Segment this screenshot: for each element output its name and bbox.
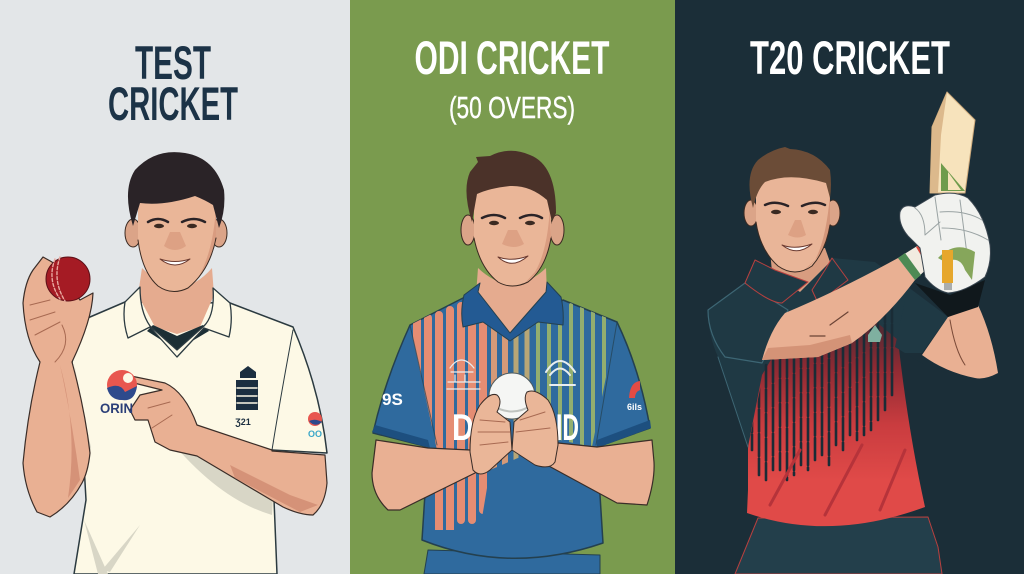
player: t20 batter <box>708 92 998 574</box>
back arm <box>922 305 998 378</box>
black cuff <box>915 280 985 317</box>
white ball <box>489 373 535 419</box>
head <box>461 151 564 286</box>
shirt lettering <box>382 390 642 448</box>
neck <box>770 248 830 292</box>
small chest crest <box>868 325 882 342</box>
sponsor logo <box>100 370 137 416</box>
panel: odi cricket <box>350 0 675 574</box>
collar <box>124 287 231 357</box>
bat <box>930 92 975 193</box>
heading: test cricket: TEST <box>135 36 211 89</box>
heading: odi cricket <box>414 31 610 125</box>
shirt <box>372 297 651 558</box>
shirt <box>72 302 327 574</box>
sleeve logo <box>629 381 640 398</box>
batting gloves <box>900 193 990 293</box>
neck <box>138 268 214 334</box>
sleeve logo <box>308 412 322 439</box>
crests <box>447 360 575 389</box>
england crest <box>235 366 258 427</box>
collar <box>462 282 563 341</box>
trousers <box>424 550 600 574</box>
collar <box>745 258 848 303</box>
arms <box>372 440 654 510</box>
neck <box>476 268 547 335</box>
shirt lettering: DI <box>452 407 482 448</box>
shirt torso <box>708 258 948 526</box>
shirt lettering: 9S <box>382 390 403 409</box>
heading: odi cricket: (50 OVERS) <box>449 90 575 125</box>
raised arm and hand <box>23 257 93 517</box>
panel: t20 cricket <box>707 40 998 574</box>
shirt lettering: 6ils <box>627 402 642 412</box>
head <box>744 147 840 272</box>
red ball <box>46 257 90 301</box>
trousers <box>735 517 942 574</box>
panel: test cricket <box>0 0 350 574</box>
heading: test cricket: CRICKET <box>108 77 238 130</box>
front arm <box>762 258 915 360</box>
sponsor logo: ORIN <box>100 400 133 416</box>
player: test bowler <box>23 152 327 574</box>
heading: odi cricket: ODI CRICKET <box>414 31 610 84</box>
sleeve logo: OO <box>308 429 322 439</box>
heading: test cricket <box>108 36 238 130</box>
shirt lettering: ID <box>556 407 579 448</box>
wristband <box>898 243 934 280</box>
england crest: Ʒ21 <box>235 417 251 427</box>
pointing arm and hand <box>130 376 327 515</box>
player: odi bowler <box>372 151 654 574</box>
hands <box>470 391 558 474</box>
head <box>125 152 227 292</box>
